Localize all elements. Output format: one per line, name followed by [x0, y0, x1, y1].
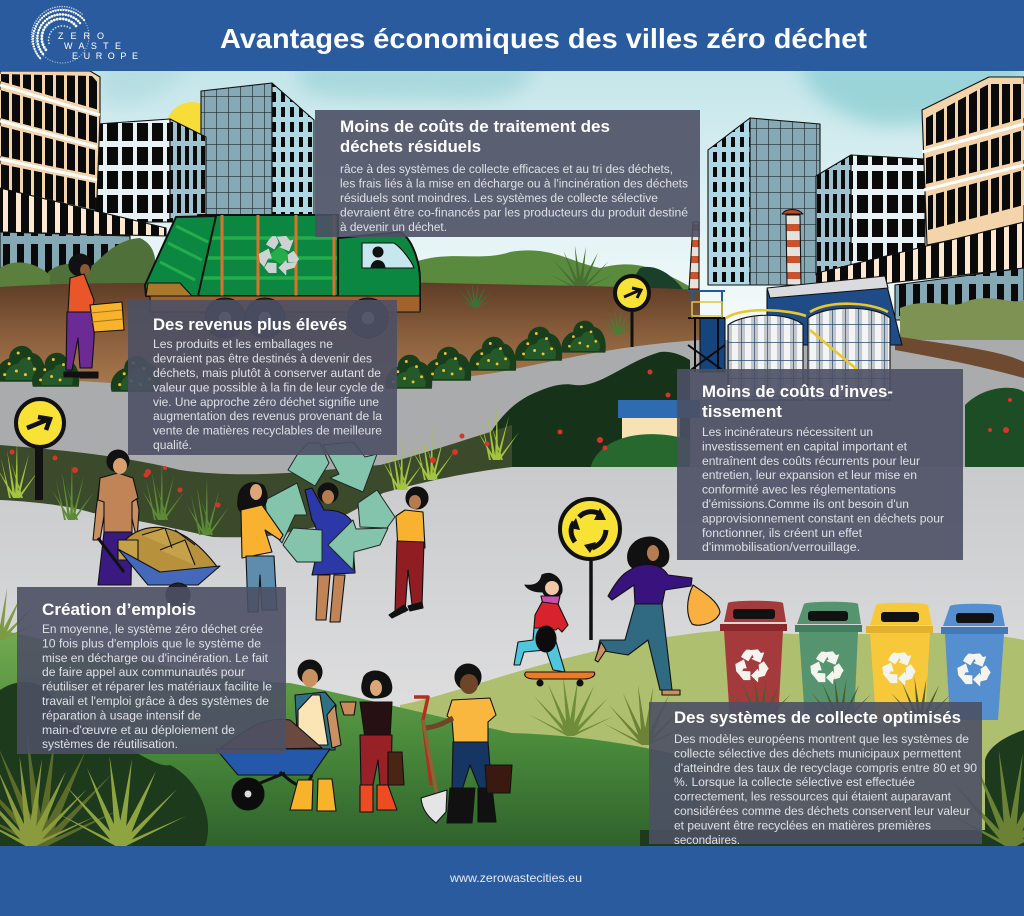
- body text: emplois: 10 fois plus d'emplois que le système de: [42, 636, 261, 650]
- body text: collecte: Des modèles européens montrent que les systèmes de: [674, 732, 969, 746]
- body text: investissement: investissement en capital important et: [702, 439, 908, 453]
- large recycling symbol: [265, 442, 395, 570]
- body text: revenus: vente de matières recyclables de meilleure: [153, 424, 382, 438]
- left white building: [95, 119, 206, 222]
- body text: investissement: Les incinérateurs nécessitent un: [702, 425, 873, 439]
- body text: traitement: [340, 162, 688, 234]
- body text: collecte: considérées comme des déchets conservent leur valeur: [674, 804, 970, 818]
- body text: investissement: entretien, leur expansion et leur mise en: [702, 468, 917, 482]
- person: woman with long hair: [238, 483, 283, 612]
- body text: collecte: %. Lorsque la collecte sélective est effectuée: [674, 775, 915, 789]
- left tower: [201, 83, 314, 215]
- gardener with wheelbarrow: [216, 660, 341, 811]
- distant shrubs: [48, 238, 155, 290]
- body text: emplois: réutiliser et réparer les matériaux facilite le: [42, 680, 272, 694]
- person: woman running with orange bag: [595, 537, 720, 695]
- left tan building: [0, 71, 166, 285]
- brown ground: [0, 282, 700, 389]
- right tower: [708, 118, 820, 285]
- panel: des revenus plus élevés: [128, 300, 397, 455]
- heading: emplois: Création d’emplois: [42, 601, 196, 619]
- body text: revenus: devraient pas être destinés à devenir des: [153, 352, 372, 366]
- logo: Zero Waste Europe: EUROPE: [72, 51, 138, 61]
- person: man with wheelbarrow of boxes: [93, 450, 220, 607]
- body text: emplois: [42, 622, 272, 751]
- road sign: arrow large: [16, 399, 64, 500]
- blue bin: [941, 604, 1008, 720]
- light road: [0, 467, 1024, 760]
- green hill: [0, 630, 700, 846]
- heading: investissement: tissement: [702, 403, 783, 421]
- body text: traitement: les frais liés à la mise en décharge ou à l'incinération des déchets: [340, 176, 688, 190]
- footer website: www.zerowastecities.eu: [449, 871, 582, 885]
- body text: emplois: réparation à usage intensif de: [42, 708, 201, 722]
- recycling bins: [720, 601, 1008, 720]
- body text: revenus: valeur que possible à la fin de leur cycle de: [153, 380, 384, 394]
- garbage truck: [145, 215, 420, 338]
- heading: traitement: [340, 118, 610, 156]
- red bin: [720, 601, 787, 720]
- logo: Zero Waste Europe: ZERO: [58, 31, 104, 41]
- body text: emplois: systèmes de réutilisation.: [42, 737, 178, 751]
- yellow bin: [866, 603, 933, 720]
- body text: investissement: fonctionner, ils créent un effet: [702, 526, 863, 540]
- body text: emplois: travail et l'emploi grâce à des systèmes de: [42, 694, 269, 708]
- dark hedge left of centre: [470, 352, 690, 470]
- heading: collecte: Des systèmes de collecte optimisés: [674, 709, 961, 727]
- person: woman in yellow and red: [389, 487, 428, 618]
- body text: collecte: correctement, les ressources qui étaient auparavant: [674, 790, 952, 804]
- foreground plants: [0, 682, 208, 846]
- heading: traitement: déchets résiduels: [340, 138, 481, 156]
- panel: des systèmes de collecte optimisés: [649, 702, 982, 847]
- right white building: [816, 155, 925, 275]
- panel: création d'emplois: [17, 587, 286, 754]
- body text: investissement: [702, 425, 944, 554]
- body text: traitement: devraient être co-financés par les producteurs du produit destiné: [340, 206, 688, 220]
- sun: [166, 102, 218, 154]
- body text: investissement: d'immobilisation/verrouillage.: [702, 540, 860, 554]
- woman with flowerpot and bucket: [340, 671, 404, 812]
- logo: Zero Waste Europe: [32, 7, 138, 63]
- body text: investissement: approvisionnement constant en déchets pour: [702, 511, 944, 525]
- body text: emplois: main-d'œuvre et au déploiement de: [42, 723, 235, 737]
- body text: investissement: entraînent des coûts récurrents pour leur: [702, 454, 920, 468]
- body text: revenus: Les produits et les emballages ne: [153, 337, 333, 351]
- body text: investissement: conformité avec les réglementations: [702, 483, 896, 497]
- road sign: arrow small: [615, 276, 649, 347]
- body text: traitement: à devenir un déchet.: [340, 220, 447, 234]
- man with shovel and bucket: [414, 664, 512, 823]
- heading: revenus: Des revenus plus élevés: [153, 316, 347, 334]
- person: woman in blue dress: [305, 483, 355, 622]
- right tan building: [817, 77, 1024, 320]
- body text: revenus: qualité.: [153, 438, 192, 452]
- body text: traitement: résiduels sont moindres. Les systèmes de collecte sélective: [340, 191, 658, 205]
- body text: collecte: secondaires.: [674, 833, 740, 847]
- body text: revenus: [153, 337, 384, 452]
- olive hill: [400, 630, 1024, 846]
- heading: traitement: Moins de coûts de traitement des: [340, 118, 610, 136]
- road sign: roundabout: [560, 499, 620, 640]
- logo: Zero Waste Europe: WASTE: [64, 41, 121, 51]
- factory: [688, 210, 902, 400]
- road grey: [0, 340, 1024, 540]
- body text: revenus: déchets, mais plutôt à conserver autant de: [153, 366, 381, 380]
- body text: emplois: de faire appel aux communautés pour: [42, 665, 245, 679]
- body text: collecte: collecte sélective des déchets municipaux permettent: [674, 746, 962, 760]
- header bar: [0, 0, 1024, 71]
- body text: emplois: En moyenne, le système zéro déchet crée: [42, 622, 263, 636]
- heading: investissement: Moins de coûts d’inves-: [702, 383, 893, 401]
- body text: investissement: d'émissions.Comme ils ont besoin d'un: [702, 497, 909, 511]
- body text: traitement: râce à des systèmes de collecte efficaces et au tri des déchets,: [340, 162, 673, 176]
- body text: emplois: mise en décharge ou d'incinération. Le fait: [42, 651, 269, 665]
- yellow-flowered bushes: [0, 321, 606, 392]
- heading: investissement: [702, 383, 893, 421]
- grass band: [0, 425, 512, 545]
- panel: moins de coûts d'investissement: [677, 369, 963, 560]
- body text: collecte: [674, 732, 977, 847]
- green bin: [795, 602, 862, 720]
- body text: collecte: d'atteindre des taux de recyclage compris entre 80 et 90: [674, 761, 977, 775]
- title: Avantages économiques des villes zéro déchet: [220, 23, 867, 54]
- person: woman carrying crate: [64, 254, 124, 378]
- footer bar: [0, 846, 1024, 916]
- person: child on skateboard: [514, 573, 595, 686]
- body text: collecte: et peuvent être recyclées en matières premières: [674, 818, 931, 832]
- body text: revenus: vie. Une approche zéro déchet signifie une: [153, 395, 379, 409]
- body text: revenus: augmentation des revenus provenant de la: [153, 409, 382, 423]
- panel: moins de coûts de traitement: [315, 110, 700, 237]
